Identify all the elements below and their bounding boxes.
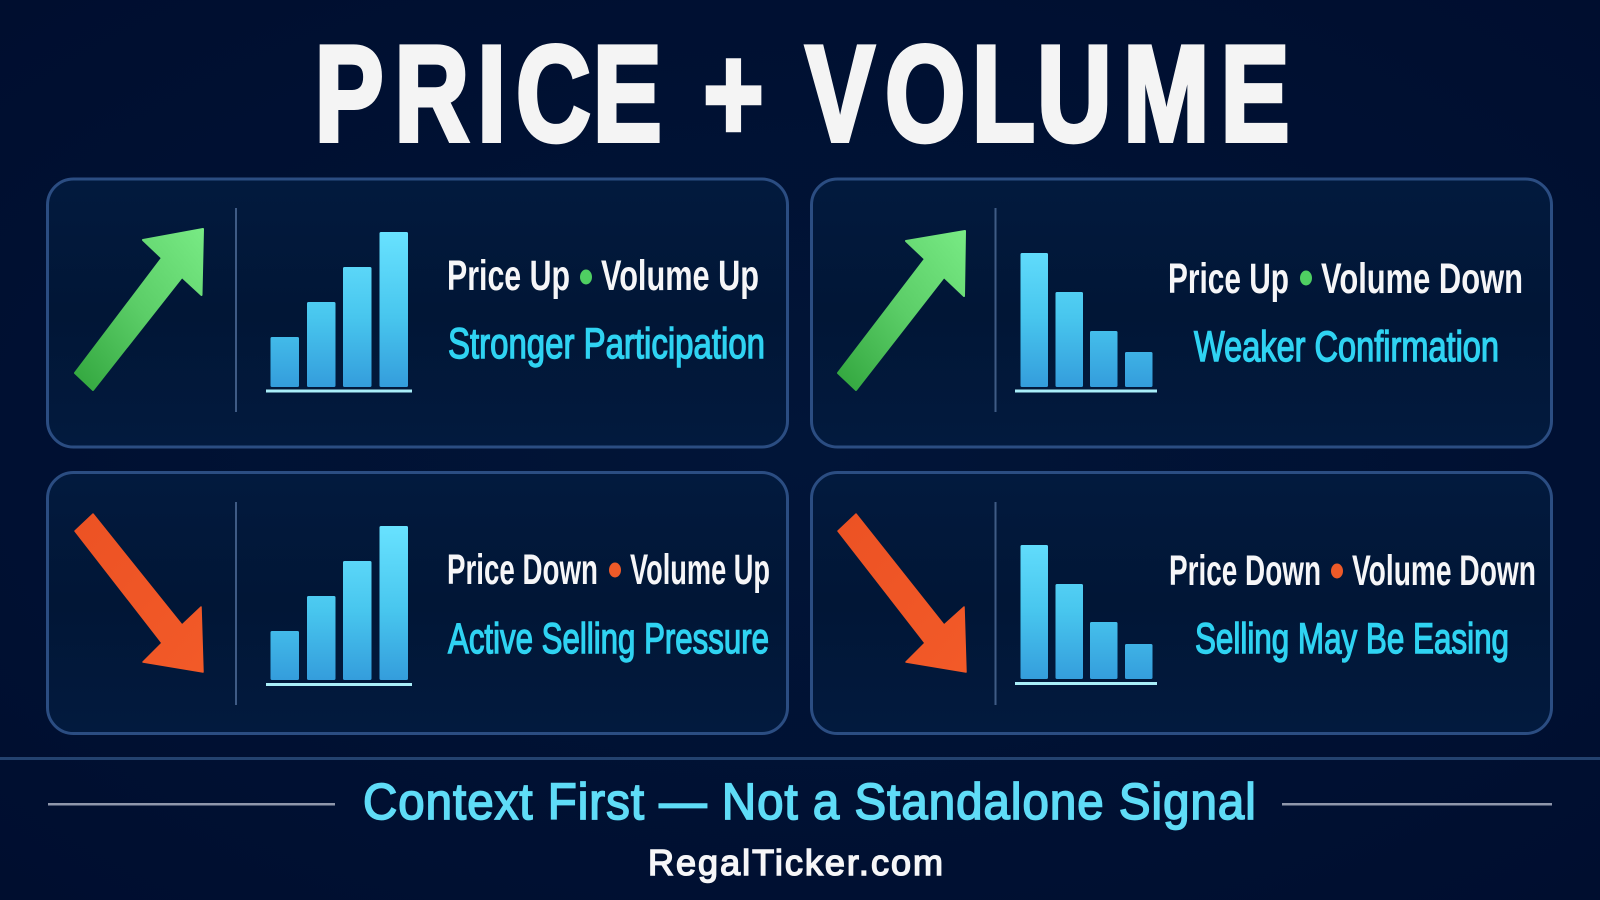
label: stronger participation: Stronger Participation <box>448 320 765 368</box>
heading: price up volume up <box>447 252 759 300</box>
bar chart: rising volume <box>266 232 412 392</box>
panel: price up, volume up <box>48 179 788 447</box>
heading: price down volume down: Price Down <box>1169 547 1321 595</box>
heading: price up volume up: Price Up <box>447 252 570 300</box>
bar chart: falling volume <box>1015 545 1157 685</box>
label: weaker confirmation: Weaker Confirmation <box>1194 323 1499 371</box>
panel: price up, volume down <box>812 179 1552 447</box>
icon: red down arrow <box>838 514 966 672</box>
heading: price up volume down: Price Up <box>1168 255 1289 303</box>
title: PRICE + VOLUME <box>315 18 1289 170</box>
icon: green up arrow <box>838 231 965 390</box>
heading: price up volume down: Volume Down <box>1321 255 1523 303</box>
icon: green up arrow <box>75 229 203 390</box>
bar chart: falling volume <box>1015 253 1157 392</box>
heading: price down volume down <box>1169 547 1536 595</box>
heading: price up volume up: Volume Up <box>601 252 759 300</box>
bar chart: rising volume <box>266 526 412 686</box>
heading: price down volume up: Volume Up <box>630 546 770 594</box>
heading: price up volume down <box>1168 255 1523 303</box>
caption: context first: Context First — Not a Standalone Signal <box>363 773 1256 830</box>
footer: site name: RegalTicker.com <box>648 842 943 883</box>
icon: red down arrow <box>75 514 203 672</box>
panel: price down, volume down <box>812 472 1552 734</box>
label: active selling pressure: Active Selling Pressure <box>448 615 769 663</box>
panel: price down, volume up <box>48 472 788 734</box>
heading: price down volume up: Price Down <box>447 546 598 594</box>
